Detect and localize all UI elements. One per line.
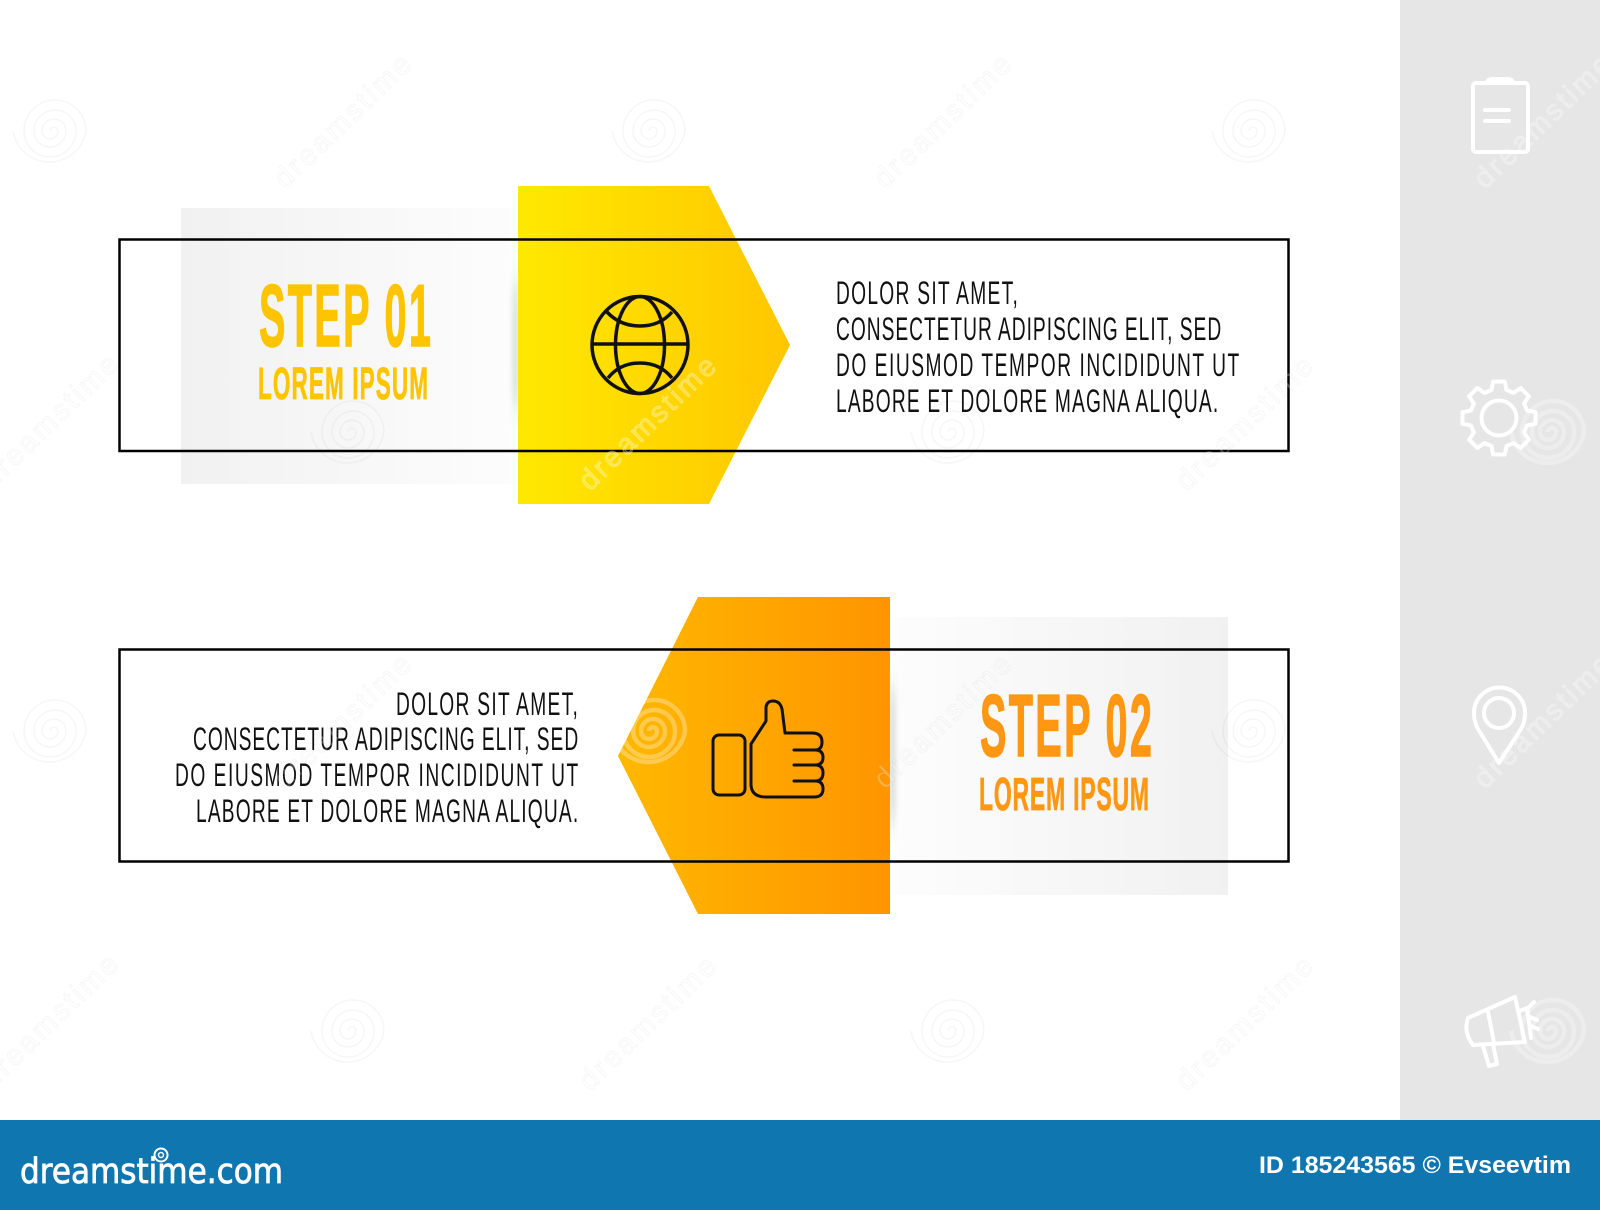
text block: step 01 description — [836, 275, 1239, 419]
sidebar panel — [1400, 0, 1600, 1120]
heading: step 01 — [258, 267, 431, 409]
arrow: step 02 orange pentagon — [618, 597, 890, 914]
heading: step 02: LOREM IPSUM — [979, 768, 1149, 820]
heading: step 01: STEP 01 — [259, 267, 431, 365]
footer banner — [0, 1120, 1600, 1210]
text block: step 01 description: LABORE ET DOLORE MAGNA ALIQUA. — [836, 383, 1218, 419]
watermark wordmarks: dreamstime — [573, 350, 723, 497]
text block: step 02 description: DO EIUSMOD TEMPOR INCIDIDUNT UT — [175, 757, 578, 793]
icon: clipboard — [1473, 79, 1528, 152]
arrow: step 01 yellow pentagon — [518, 186, 790, 504]
frame: step 02 outline — [120, 650, 1288, 862]
icon: megaphone — [1466, 997, 1538, 1066]
icon: globe — [592, 296, 688, 394]
panel: step 02 backing card — [890, 617, 1228, 895]
watermark wordmarks: dreamstime — [268, 48, 418, 195]
panel: step 01 backing card — [181, 208, 518, 484]
text block: step 01 description: DO EIUSMOD TEMPOR INCIDIDUNT UT — [836, 347, 1239, 383]
watermark wordmarks: dreamstime — [268, 648, 418, 795]
frame: step 01 outline — [120, 240, 1288, 451]
watermark wordmarks: dreamstime — [1170, 350, 1320, 497]
watermark wordmarks: dreamstime — [1170, 950, 1320, 1097]
shadow: step 01 arrow edge — [513, 285, 518, 405]
footer logo: dreamstime.com: dreamstime.com — [20, 1152, 283, 1192]
text block: step 02 description: LABORE ET DOLORE MAGNA ALIQUA. — [196, 793, 578, 829]
heading: step 02: STEP 02 — [980, 677, 1152, 775]
text block: step 02 description — [175, 686, 578, 829]
watermark wordmarks: dreamstime — [868, 648, 1018, 795]
watermark wordmarks: dreamstime — [573, 950, 723, 1097]
footer credit: ID 185243565 © Evseevtim — [1259, 1152, 1571, 1179]
heading: step 01: LOREM IPSUM — [258, 359, 428, 409]
text block: step 01 description: DOLOR SIT AMET, — [836, 275, 1018, 311]
heading: step 02 — [979, 677, 1152, 820]
watermark spirals — [13, 100, 1584, 1062]
text block: step 02 description: CONSECTETUR ADIPISCING ELIT, SED — [193, 721, 578, 757]
icon: gear — [1462, 382, 1536, 454]
text block: step 02 description: DOLOR SIT AMET, — [396, 686, 578, 722]
icon: location pin — [1474, 688, 1525, 763]
text block: step 01 description: CONSECTETUR ADIPISCING ELIT, SED — [836, 311, 1221, 347]
watermark wordmarks: dreamstime — [868, 48, 1018, 195]
icon: thumbs up — [713, 701, 823, 797]
shadow: step 02 arrow edge — [890, 690, 895, 820]
